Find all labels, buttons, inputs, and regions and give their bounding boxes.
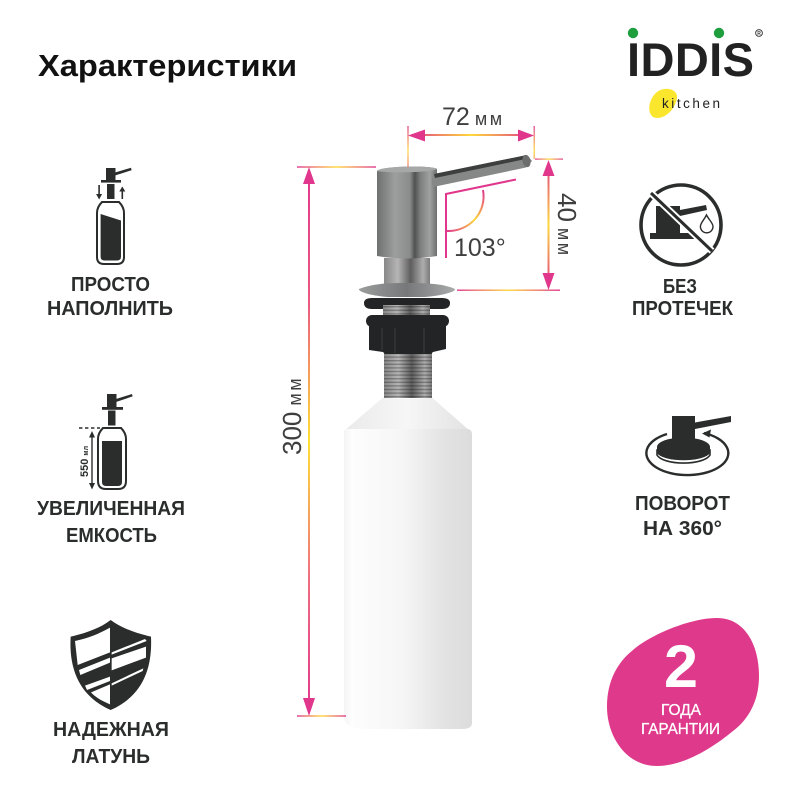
logo: IDDIS kitchen (627, 28, 762, 118)
angle: 103 degrees (446, 180, 516, 262)
panel: reliable brass (53, 620, 169, 768)
label (635, 492, 730, 540)
panel: 360 rotation (635, 416, 731, 540)
angle value: 103° (454, 234, 506, 262)
dispenser bottle (344, 398, 472, 729)
dimension: height 40 mm (457, 158, 582, 291)
label (37, 497, 185, 547)
spout (432, 154, 532, 187)
threaded shank (383, 305, 432, 398)
icon: rotating faucet (646, 416, 731, 475)
panel: easy to fill (47, 168, 173, 320)
label: НАДЕЖНАЯ (53, 718, 169, 741)
label (53, 718, 169, 768)
label: ЕМКОСТЬ (66, 524, 157, 547)
title: Характеристики (38, 48, 297, 83)
label (47, 273, 173, 320)
label: УВЕЛИЧЕННАЯ (37, 497, 185, 520)
label: НА 360° (643, 517, 722, 540)
flange (359, 283, 455, 297)
lock nut (364, 298, 450, 354)
width value: 72 мм (442, 103, 505, 131)
icon: bottle 550 ml (79, 394, 133, 490)
label (632, 275, 733, 320)
label: ПРОТЕЧЕК (632, 297, 733, 320)
label: НАПОЛНИТЬ (47, 297, 173, 320)
warranty text: ГАРАНТИИ (641, 721, 720, 738)
product: soap dispenser (344, 154, 532, 729)
dimension: height 300 mm (277, 166, 376, 717)
warranty text (641, 702, 720, 738)
40 mm value: 40 мм (552, 193, 582, 258)
panel: increased capacity (37, 394, 185, 547)
label: БЕЗ (663, 275, 697, 298)
warranty number: 2 (664, 633, 698, 700)
logo: IDDIS kitchen: R (757, 31, 761, 37)
label: ПОВОРОТ (635, 492, 730, 515)
dimension: width 72 mm (407, 103, 535, 167)
icon: crossed faucet with drop (641, 185, 721, 265)
neck (384, 258, 430, 286)
panel: no leaks (632, 185, 733, 320)
warranty text: ГОДА (661, 702, 701, 719)
volume label: 550 мл (79, 446, 91, 477)
callout: 2-year warranty (607, 618, 759, 766)
cap (377, 167, 437, 258)
label: ПРОСТО (71, 273, 150, 296)
icon: bottle with pump and arrows (96, 168, 132, 264)
height value: 300мм (277, 376, 307, 455)
logo subline: kitchen (662, 96, 720, 111)
icon: shield (70, 620, 151, 710)
logo wordmark: IDDIS (627, 33, 754, 86)
label: ЛАТУНЬ (72, 745, 150, 768)
